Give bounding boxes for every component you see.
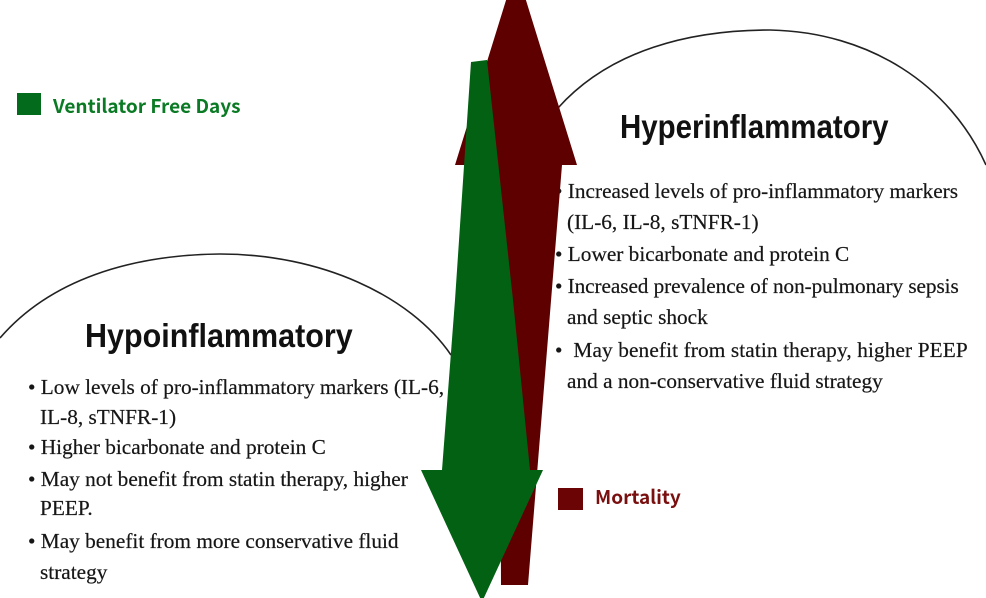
text block: hyperinflammatory characteristics: and septic shock bbox=[567, 305, 708, 329]
text block: hyperinflammatory characteristics bbox=[555, 179, 968, 393]
heading: Hypoinflammatory: Hypoinflammatory bbox=[85, 317, 353, 354]
text block: hypoinflammatory characteristics: • May benefit from more conservative fluid bbox=[28, 529, 399, 553]
legend swatch: dark red bbox=[558, 488, 583, 510]
text block: hypoinflammatory characteristics: strategy bbox=[40, 560, 107, 584]
text block: hypoinflammatory characteristics: IL-8, sTNFR-1) bbox=[40, 405, 176, 429]
text block: hyperinflammatory characteristics: • Increased prevalence of non-pulmonary sepsis bbox=[555, 274, 959, 298]
text block: hypoinflammatory characteristics bbox=[28, 375, 444, 584]
legend swatch: green bbox=[17, 93, 41, 115]
text block: hyperinflammatory characteristics: • Increased levels of pro-inflammatory markers bbox=[555, 179, 958, 203]
text block: hypoinflammatory characteristics: PEEP. bbox=[40, 496, 93, 520]
text block: hypoinflammatory characteristics: • Low levels of pro-inflammatory markers (IL-6, bbox=[28, 375, 444, 399]
text block: hyperinflammatory characteristics: and a non-conservative fluid strategy bbox=[567, 369, 883, 393]
legend label: Ventilator Free Days: Ventilator Free Days bbox=[53, 92, 241, 119]
legend: ventilator free days bbox=[17, 92, 241, 119]
heading: Hyperinflammatory: Hyperinflammatory bbox=[620, 108, 889, 145]
text block: hypoinflammatory characteristics: • Higher bicarbonate and protein C bbox=[28, 435, 326, 459]
text block: hyperinflammatory characteristics: (IL-6, IL-8, sTNFR-1) bbox=[567, 210, 759, 234]
text block: hyperinflammatory characteristics: • Lower bicarbonate and protein C bbox=[555, 242, 849, 266]
legend label: Mortality: Mortality bbox=[595, 483, 681, 510]
legend: mortality bbox=[558, 483, 681, 510]
text block: hypoinflammatory characteristics: • May not benefit from statin therapy, higher bbox=[28, 467, 408, 491]
text block: hyperinflammatory characteristics: • May benefit from statin therapy, higher PEEP bbox=[555, 338, 968, 362]
